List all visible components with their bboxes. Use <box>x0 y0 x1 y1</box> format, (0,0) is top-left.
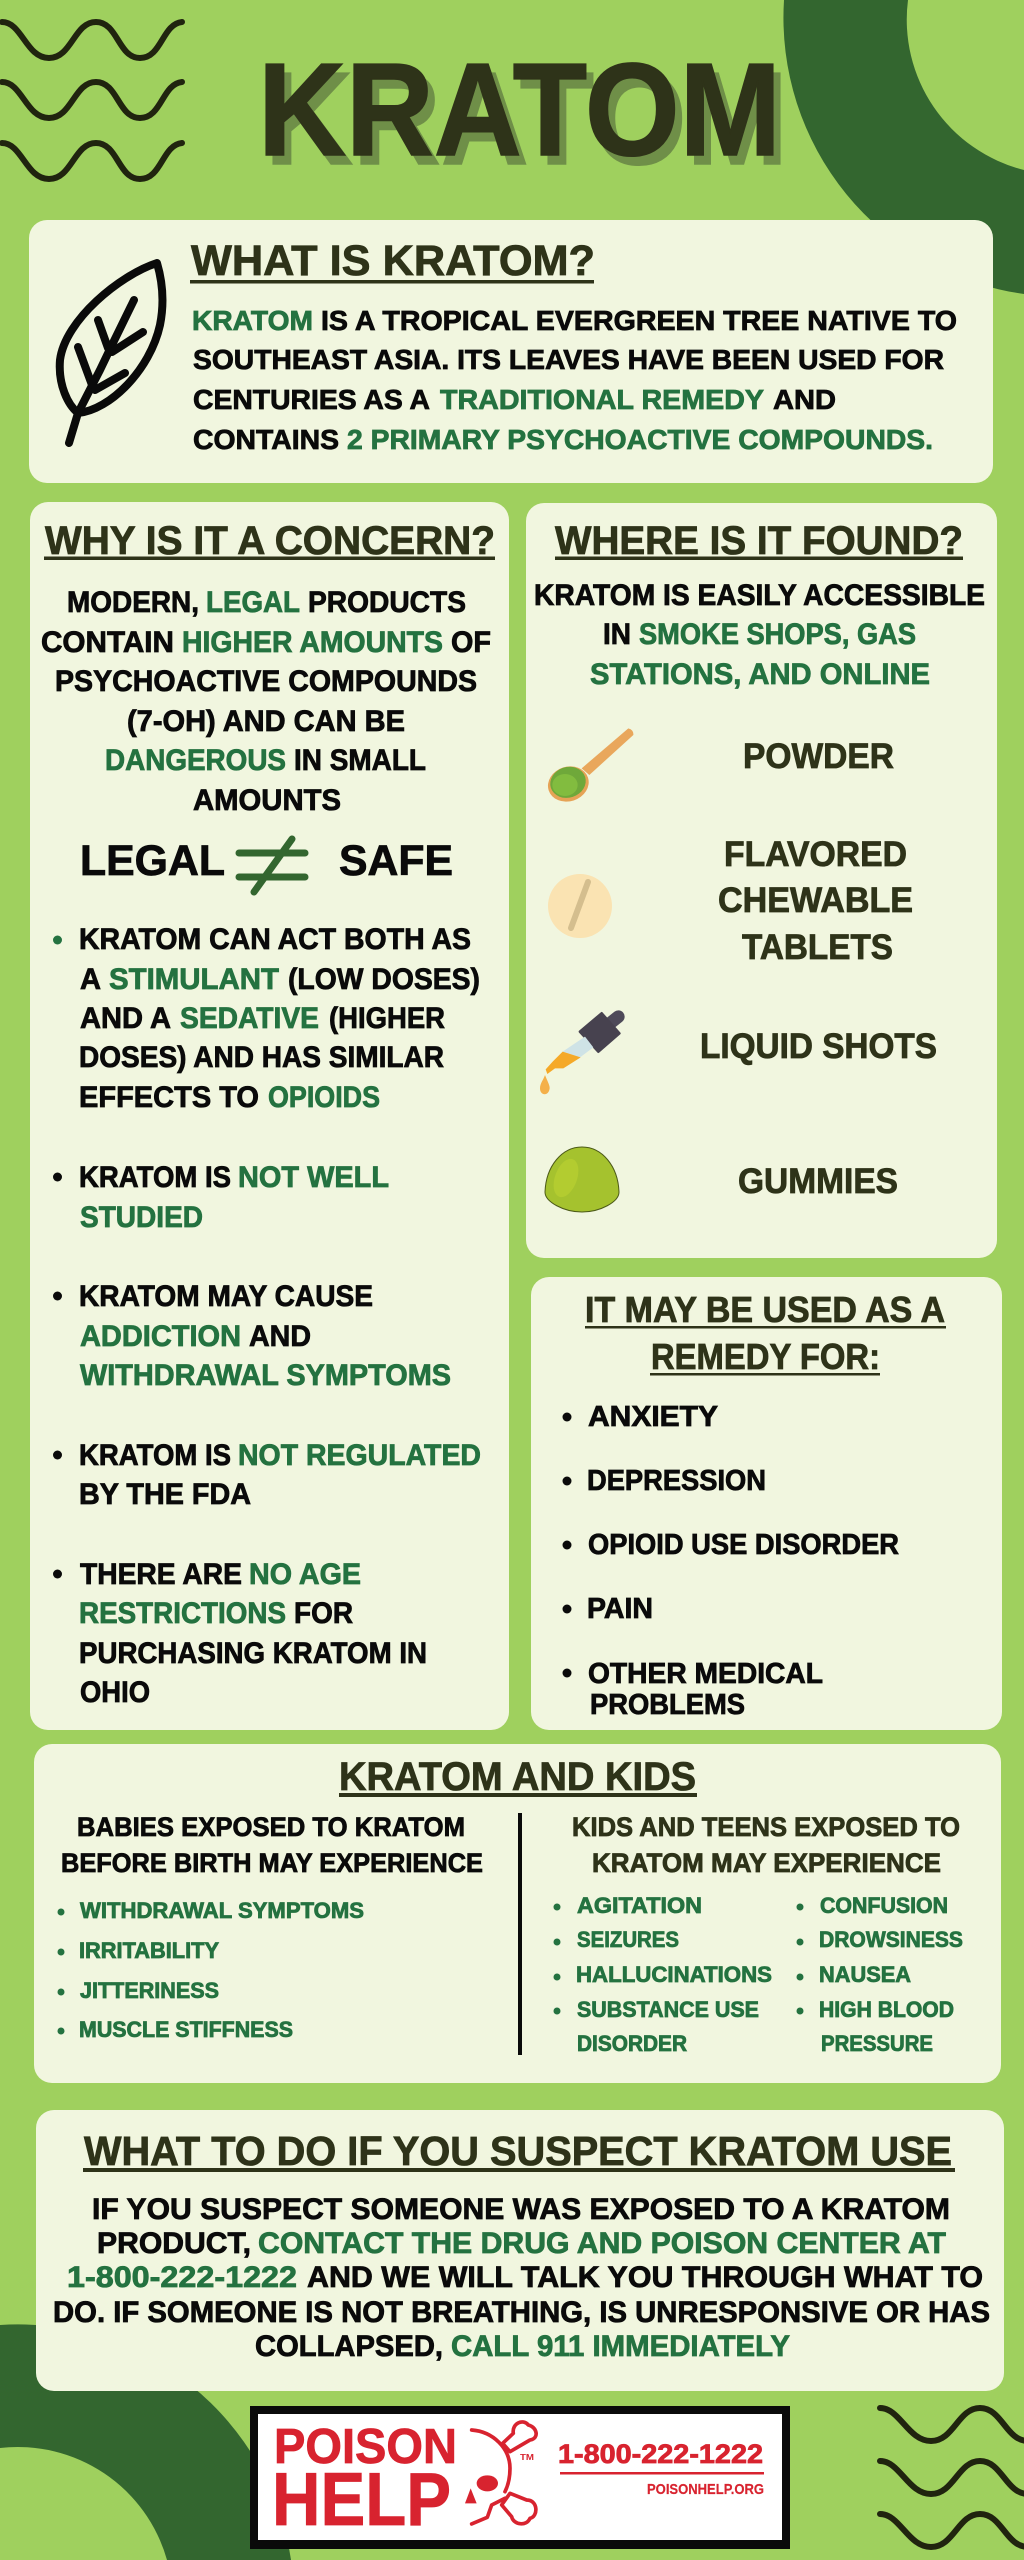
icon: leaf <box>60 263 163 443</box>
logo wordmark: HELP <box>272 2457 451 2541</box>
label: flavored chewable tablets: FLAVORED <box>724 835 907 874</box>
list: kids symptoms column one: DISORDER <box>577 2031 687 2056</box>
bullet: no age restrictions: NO AGE <box>249 1558 361 1591</box>
text: what to do instructions: PRODUCT, <box>97 2227 251 2260</box>
text: what to do instructions <box>53 2193 990 2363</box>
heading: why is it a concern: WHY IS IT A CONCERN? <box>45 519 495 563</box>
heading: where is it found: WHERE IS IT FOUND? <box>555 519 963 563</box>
list: baby symptoms: IRRITABILITY <box>79 1938 219 1963</box>
list: kids symptoms column one: SEIZURES <box>577 1927 679 1952</box>
text: what is kratom description: IS A TROPICAL EVERGREEN TREE NATIVE TO <box>321 305 957 336</box>
text: what to do instructions: AND WE WILL TALK YOU THROUGH WHAT TO <box>307 2261 983 2294</box>
callout: legal does not equal safe: SAFE <box>339 837 453 885</box>
logo trademark: TM <box>520 2453 534 2462</box>
bullet: addiction and withdrawal <box>53 1280 451 1392</box>
bullet: stimulant and sedative: KRATOM CAN ACT BOTH AS <box>79 923 471 956</box>
panel: kratom and kids <box>34 1744 1001 2083</box>
bullet: not well studied <box>53 1161 389 1234</box>
text: easily accessible: SMOKE SHOPS, GAS <box>639 618 916 651</box>
title: KRATOM: KRATOM <box>258 36 781 183</box>
bullet: stimulant and sedative: EFFECTS TO <box>79 1081 259 1114</box>
subheading: babies exposed <box>61 1812 483 1878</box>
bullet: stimulant and sedative: SEDATIVE <box>180 1002 319 1035</box>
list: kids symptoms column two: PRESSURE <box>821 2031 933 2056</box>
list: kids symptoms column two <box>796 1893 963 2056</box>
bullet: stimulant and sedative: (HIGHER <box>329 1002 445 1035</box>
logo wordmark <box>272 2420 457 2541</box>
text: what to do instructions: COLLAPSED, <box>255 2330 443 2363</box>
list: remedy uses: PAIN <box>587 1593 653 1625</box>
panel: where is it found <box>526 503 997 1258</box>
bullet: stimulant and sedative: OPIOIDS <box>268 1081 380 1114</box>
text: what is kratom description: KRATOM <box>192 305 313 336</box>
bullet: not regulated: NOT REGULATED <box>238 1439 481 1472</box>
text: what is kratom description: CENTURIES AS A <box>193 384 430 415</box>
text: easily accessible: KRATOM IS EASILY ACCESSIBLE <box>534 579 985 612</box>
bullet: not regulated <box>53 1439 481 1511</box>
icon: not equal sign <box>239 839 305 892</box>
list: kids symptoms column two: DROWSINESS <box>819 1927 963 1952</box>
text: modern legal products: PSYCHOACTIVE COMPOUNDS <box>55 665 477 698</box>
bullet: addiction and withdrawal: AND <box>249 1320 311 1353</box>
icon: gummy <box>545 1147 619 1212</box>
icon: spoon of powder <box>543 728 633 807</box>
list: remedy uses <box>562 1401 899 1721</box>
icon: skull and crossbones <box>465 2422 536 2524</box>
text: modern legal products: IN SMALL <box>294 744 426 777</box>
heading: what to do if you suspect kratom use: WHAT TO DO IF YOU SUSPECT KRATOM USE <box>84 2128 952 2174</box>
title: KRATOM: KRATOM <box>265 45 788 192</box>
list: baby symptoms: MUSCLE STIFFNESS <box>79 2017 293 2042</box>
heading: it may be used as a remedy for: IT MAY BE USED AS A <box>585 1289 945 1330</box>
heading: what is kratom: WHAT IS KRATOM? <box>191 237 595 285</box>
text: what is kratom description: SOUTHEAST ASIA. ITS LEAVES HAVE BEEN USED FOR <box>193 344 944 375</box>
text: easily accessible: STATIONS, AND ONLINE <box>590 658 930 691</box>
label: gummies: GUMMIES <box>738 1162 898 1201</box>
text: what is kratom description: CONTAINS <box>193 424 339 455</box>
text: what to do instructions: CONTACT THE DRUG AND POISON CENTER AT <box>258 2227 946 2260</box>
panel: remedy <box>531 1277 1002 1730</box>
text: what to do instructions: IF YOU SUSPECT SOMEONE WAS EXPOSED TO A KRATOM <box>92 2193 950 2226</box>
bullet: no age restrictions: PURCHASING KRATOM IN <box>79 1637 427 1670</box>
bullet: not regulated: KRATOM IS <box>79 1439 231 1472</box>
panel: what is kratom <box>29 220 993 483</box>
bullet: stimulant and sedative: (LOW DOSES) <box>288 963 480 996</box>
label: liquid shots: LIQUID SHOTS <box>700 1027 937 1066</box>
logo: poison help <box>250 2406 790 2549</box>
decorative ring: bottom left <box>0 2324 291 2560</box>
list: remedy uses: PROBLEMS <box>590 1689 745 1721</box>
panel: why is it a concern <box>30 502 509 1730</box>
bullet: no age restrictions: OHIO <box>80 1676 150 1709</box>
text: modern legal products: LEGAL <box>206 586 300 619</box>
decorative ring: top right <box>783 0 1024 294</box>
list: remedy uses: ANXIETY <box>588 1401 718 1433</box>
bullet: not well studied: KRATOM IS <box>79 1161 231 1194</box>
text: modern legal products: (7-OH) AND CAN BE <box>127 705 405 738</box>
text: modern legal products: AMOUNTS <box>193 784 341 817</box>
subheading: kids and teens exposed: KRATOM MAY EXPERIENCE <box>592 1848 941 1878</box>
text: what to do instructions: CALL 911 IMMEDIATELY <box>451 2330 790 2363</box>
bullet: addiction and withdrawal: KRATOM MAY CAUSE <box>79 1280 373 1313</box>
list: concern bullets <box>53 923 481 1709</box>
divider line <box>518 1813 522 2055</box>
bullet: not regulated: BY THE FDA <box>79 1478 251 1511</box>
bullet: no age restrictions: THERE ARE <box>80 1558 242 1591</box>
subheading: kids and teens exposed <box>572 1812 960 1878</box>
decorative waves: bottom right <box>880 2408 1024 2547</box>
label: flavored chewable tablets <box>718 835 913 967</box>
bullet: stimulant and sedative: DOSES) AND HAS SIMILAR <box>79 1041 444 1074</box>
text: modern legal products: MODERN, <box>67 586 199 619</box>
text: what is kratom description: AND <box>773 384 836 415</box>
label: powder: POWDER <box>743 737 894 776</box>
bullet: stimulant and sedative: STIMULANT <box>109 963 279 996</box>
bullet: stimulant and sedative: A <box>80 963 101 996</box>
text: modern legal products: OF <box>451 626 491 659</box>
bullet: stimulant and sedative: AND A <box>80 1002 171 1035</box>
list: kids symptoms column one <box>554 1893 772 2056</box>
list: remedy uses: OTHER MEDICAL <box>588 1658 823 1690</box>
text: modern legal products: CONTAIN <box>41 626 174 659</box>
label: flavored chewable tablets: TABLETS <box>742 928 893 967</box>
bullet: stimulant and sedative <box>53 923 480 1114</box>
subheading: babies exposed: BABIES EXPOSED TO KRATOM <box>77 1812 465 1842</box>
list: kids symptoms column one: SUBSTANCE USE <box>577 1997 759 2022</box>
list: baby symptoms: JITTERINESS <box>80 1978 219 2003</box>
heading: kratom and kids: KRATOM AND KIDS <box>339 1755 696 1799</box>
panel: what to do <box>36 2110 1004 2391</box>
logo url: POISONHELP.ORG <box>647 2481 764 2498</box>
logo phone number: 1-800-222-1222 <box>558 2439 763 2469</box>
text: what is kratom description: TRADITIONAL REMEDY <box>440 384 764 415</box>
text: modern legal products <box>41 586 491 817</box>
list: remedy uses: OPIOID USE DISORDER <box>588 1529 899 1561</box>
callout: legal does not equal safe <box>80 837 453 892</box>
list: kids symptoms column two: NAUSEA <box>819 1962 911 1987</box>
text: easily accessible <box>534 579 985 691</box>
text: modern legal products: PRODUCTS <box>308 586 466 619</box>
subheading: kids and teens exposed: KIDS AND TEENS EXPOSED TO <box>572 1812 960 1842</box>
text: what is kratom description <box>192 305 957 455</box>
bullet: no age restrictions: RESTRICTIONS <box>79 1597 286 1630</box>
bullet: addiction and withdrawal: WITHDRAWAL SYMPTOMS <box>80 1359 451 1392</box>
text: what to do instructions: DO. IF SOMEONE IS NOT BREATHING, IS UNRESPONSIVE OR HAS <box>53 2296 990 2329</box>
decorative waves: top left <box>2 22 182 179</box>
text: what is kratom description: 2 PRIMARY PSYCHOACTIVE COMPOUNDS. <box>347 424 933 455</box>
text: modern legal products: HIGHER AMOUNTS <box>182 626 443 659</box>
heading: it may be used as a remedy for <box>585 1289 946 1377</box>
callout: legal does not equal safe: LEGAL <box>80 837 225 885</box>
logo wordmark: POISON <box>274 2420 457 2474</box>
text: easily accessible: IN <box>603 618 631 651</box>
list: baby symptoms: WITHDRAWAL SYMPTOMS <box>80 1898 364 1923</box>
list: baby symptoms <box>58 1898 364 2042</box>
text: what to do instructions: 1-800-222-1222 <box>67 2261 297 2294</box>
bullet: no age restrictions: FOR <box>294 1597 353 1630</box>
subheading: babies exposed: BEFORE BIRTH MAY EXPERIENCE <box>61 1848 483 1878</box>
icon: liquid dropper <box>540 1013 619 1094</box>
text: modern legal products: DANGEROUS <box>105 744 286 777</box>
bullet: no age restrictions <box>53 1558 427 1709</box>
list: kids symptoms column one: HALLUCINATIONS <box>576 1962 772 1987</box>
list: kids symptoms column two: CONFUSION <box>820 1893 948 1918</box>
label: flavored chewable tablets: CHEWABLE <box>718 881 913 920</box>
bullet: addiction and withdrawal: ADDICTION <box>80 1320 241 1353</box>
icon: tablet <box>548 874 612 938</box>
list: kids symptoms column two: HIGH BLOOD <box>819 1997 954 2022</box>
heading: it may be used as a remedy for: REMEDY FOR: <box>651 1336 880 1377</box>
bullet: not well studied: STUDIED <box>80 1201 203 1234</box>
bullet: not well studied: NOT WELL <box>238 1161 389 1194</box>
list: kids symptoms column one: AGITATION <box>577 1893 702 1918</box>
list: remedy uses: DEPRESSION <box>587 1465 766 1497</box>
